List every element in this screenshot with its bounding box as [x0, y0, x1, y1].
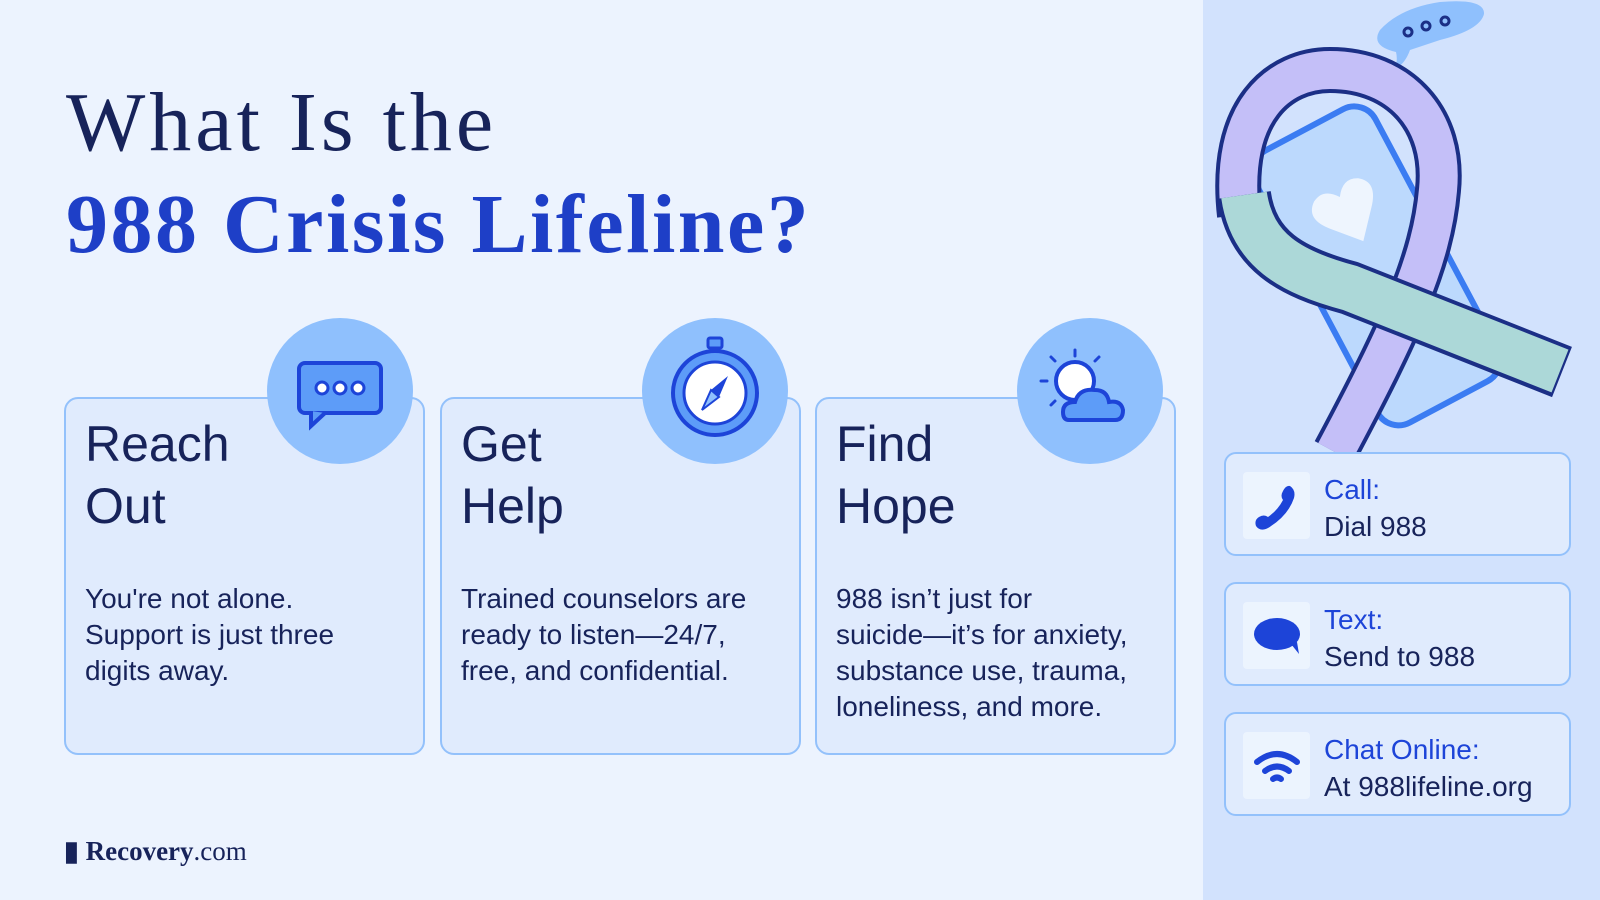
option: text: Send to 988	[1324, 641, 1475, 672]
icon: sun and cloud	[1017, 318, 1163, 464]
title: What Is the	[66, 76, 497, 169]
illustration: ribbon and phone	[1215, 1, 1572, 452]
card: reach out	[64, 397, 425, 755]
option: chat online: Chat Online:	[1324, 734, 1480, 765]
icon: compass stopwatch	[642, 318, 788, 464]
icon: wifi	[1243, 732, 1310, 799]
card: reach out: Reach	[85, 416, 230, 472]
option: chat online: At 988lifeline.org	[1324, 771, 1533, 802]
card: get help: Get	[461, 416, 542, 472]
card: get help	[440, 397, 801, 755]
card: find hope: 988 isn’t just for	[836, 583, 1032, 614]
card: reach out: You're not alone.	[85, 583, 293, 614]
card: find hope	[815, 397, 1176, 755]
option: text: Text:	[1324, 604, 1383, 635]
card: reach out: digits away.	[85, 655, 229, 686]
card: find hope: substance use, trauma,	[836, 655, 1127, 686]
card: find hope: Find	[836, 416, 933, 472]
icon: phone	[1243, 472, 1310, 539]
card: reach out: Support is just three	[85, 619, 334, 650]
option: chat online	[1224, 712, 1571, 816]
card: reach out: Out	[85, 478, 166, 534]
card: find hope: suicide—it’s for anxiety,	[836, 619, 1128, 650]
sidebar background	[1203, 0, 1600, 900]
card: get help: free, and confidential.	[461, 655, 729, 686]
speech bubble	[1377, 1, 1484, 69]
title: 988 Crisis Lifeline?	[66, 178, 811, 271]
icon: message	[1243, 602, 1310, 669]
option: text	[1224, 582, 1571, 686]
logo: ▮ Recovery.com	[64, 836, 247, 866]
icon: chat bubble	[267, 318, 413, 464]
title	[66, 76, 811, 271]
option: call: Dial 988	[1324, 511, 1427, 542]
option: call: Call:	[1324, 474, 1380, 505]
card: get help: ready to listen—24/7,	[461, 619, 726, 650]
card: get help: Trained counselors are	[461, 583, 746, 614]
card: find hope: Hope	[836, 478, 956, 534]
option: call	[1224, 452, 1571, 556]
card: find hope: loneliness, and more.	[836, 691, 1102, 722]
card: get help: Help	[461, 478, 564, 534]
